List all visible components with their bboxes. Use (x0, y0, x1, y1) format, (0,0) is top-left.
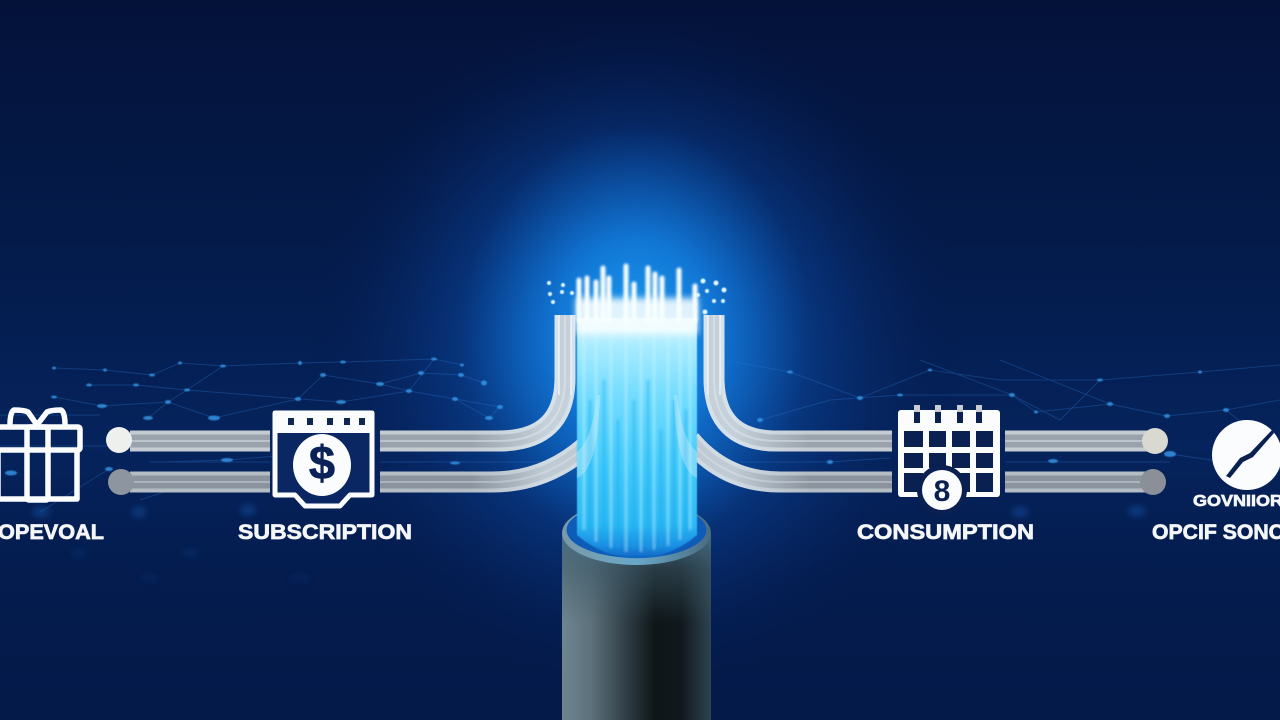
icon: gift (0, 410, 80, 500)
network lines left (0, 359, 540, 512)
icon: consumption calendar: 8 (934, 475, 950, 508)
network lines right (735, 360, 1280, 470)
icon: consumption calendar (898, 405, 1000, 515)
label: options: OPCIF SONC (1152, 521, 1280, 544)
fiber bundle upper left (130, 315, 571, 441)
fiber bundle lower left (130, 447, 585, 482)
glowing fiber core (577, 318, 697, 558)
endpoint nodes (106, 427, 1168, 495)
fiber bundle upper right (708, 315, 1150, 441)
fiber bundle lower right (690, 440, 1150, 482)
label: governor: GOVNIIOR (1193, 493, 1280, 510)
label: approval: OPEVOAL (0, 521, 104, 544)
faint lower bokeh (32, 505, 1146, 582)
cable jacket (562, 501, 711, 720)
glowing fiber tips (547, 266, 726, 334)
icon: subscription (273, 411, 374, 506)
icon: subscription: $ (309, 436, 335, 489)
network nodes (5, 358, 1248, 476)
icon: governor dial (1212, 420, 1280, 490)
label: consumption: CONSUMPTION (857, 521, 1034, 544)
label: subscription: SUBSCRIPTION (238, 521, 412, 544)
